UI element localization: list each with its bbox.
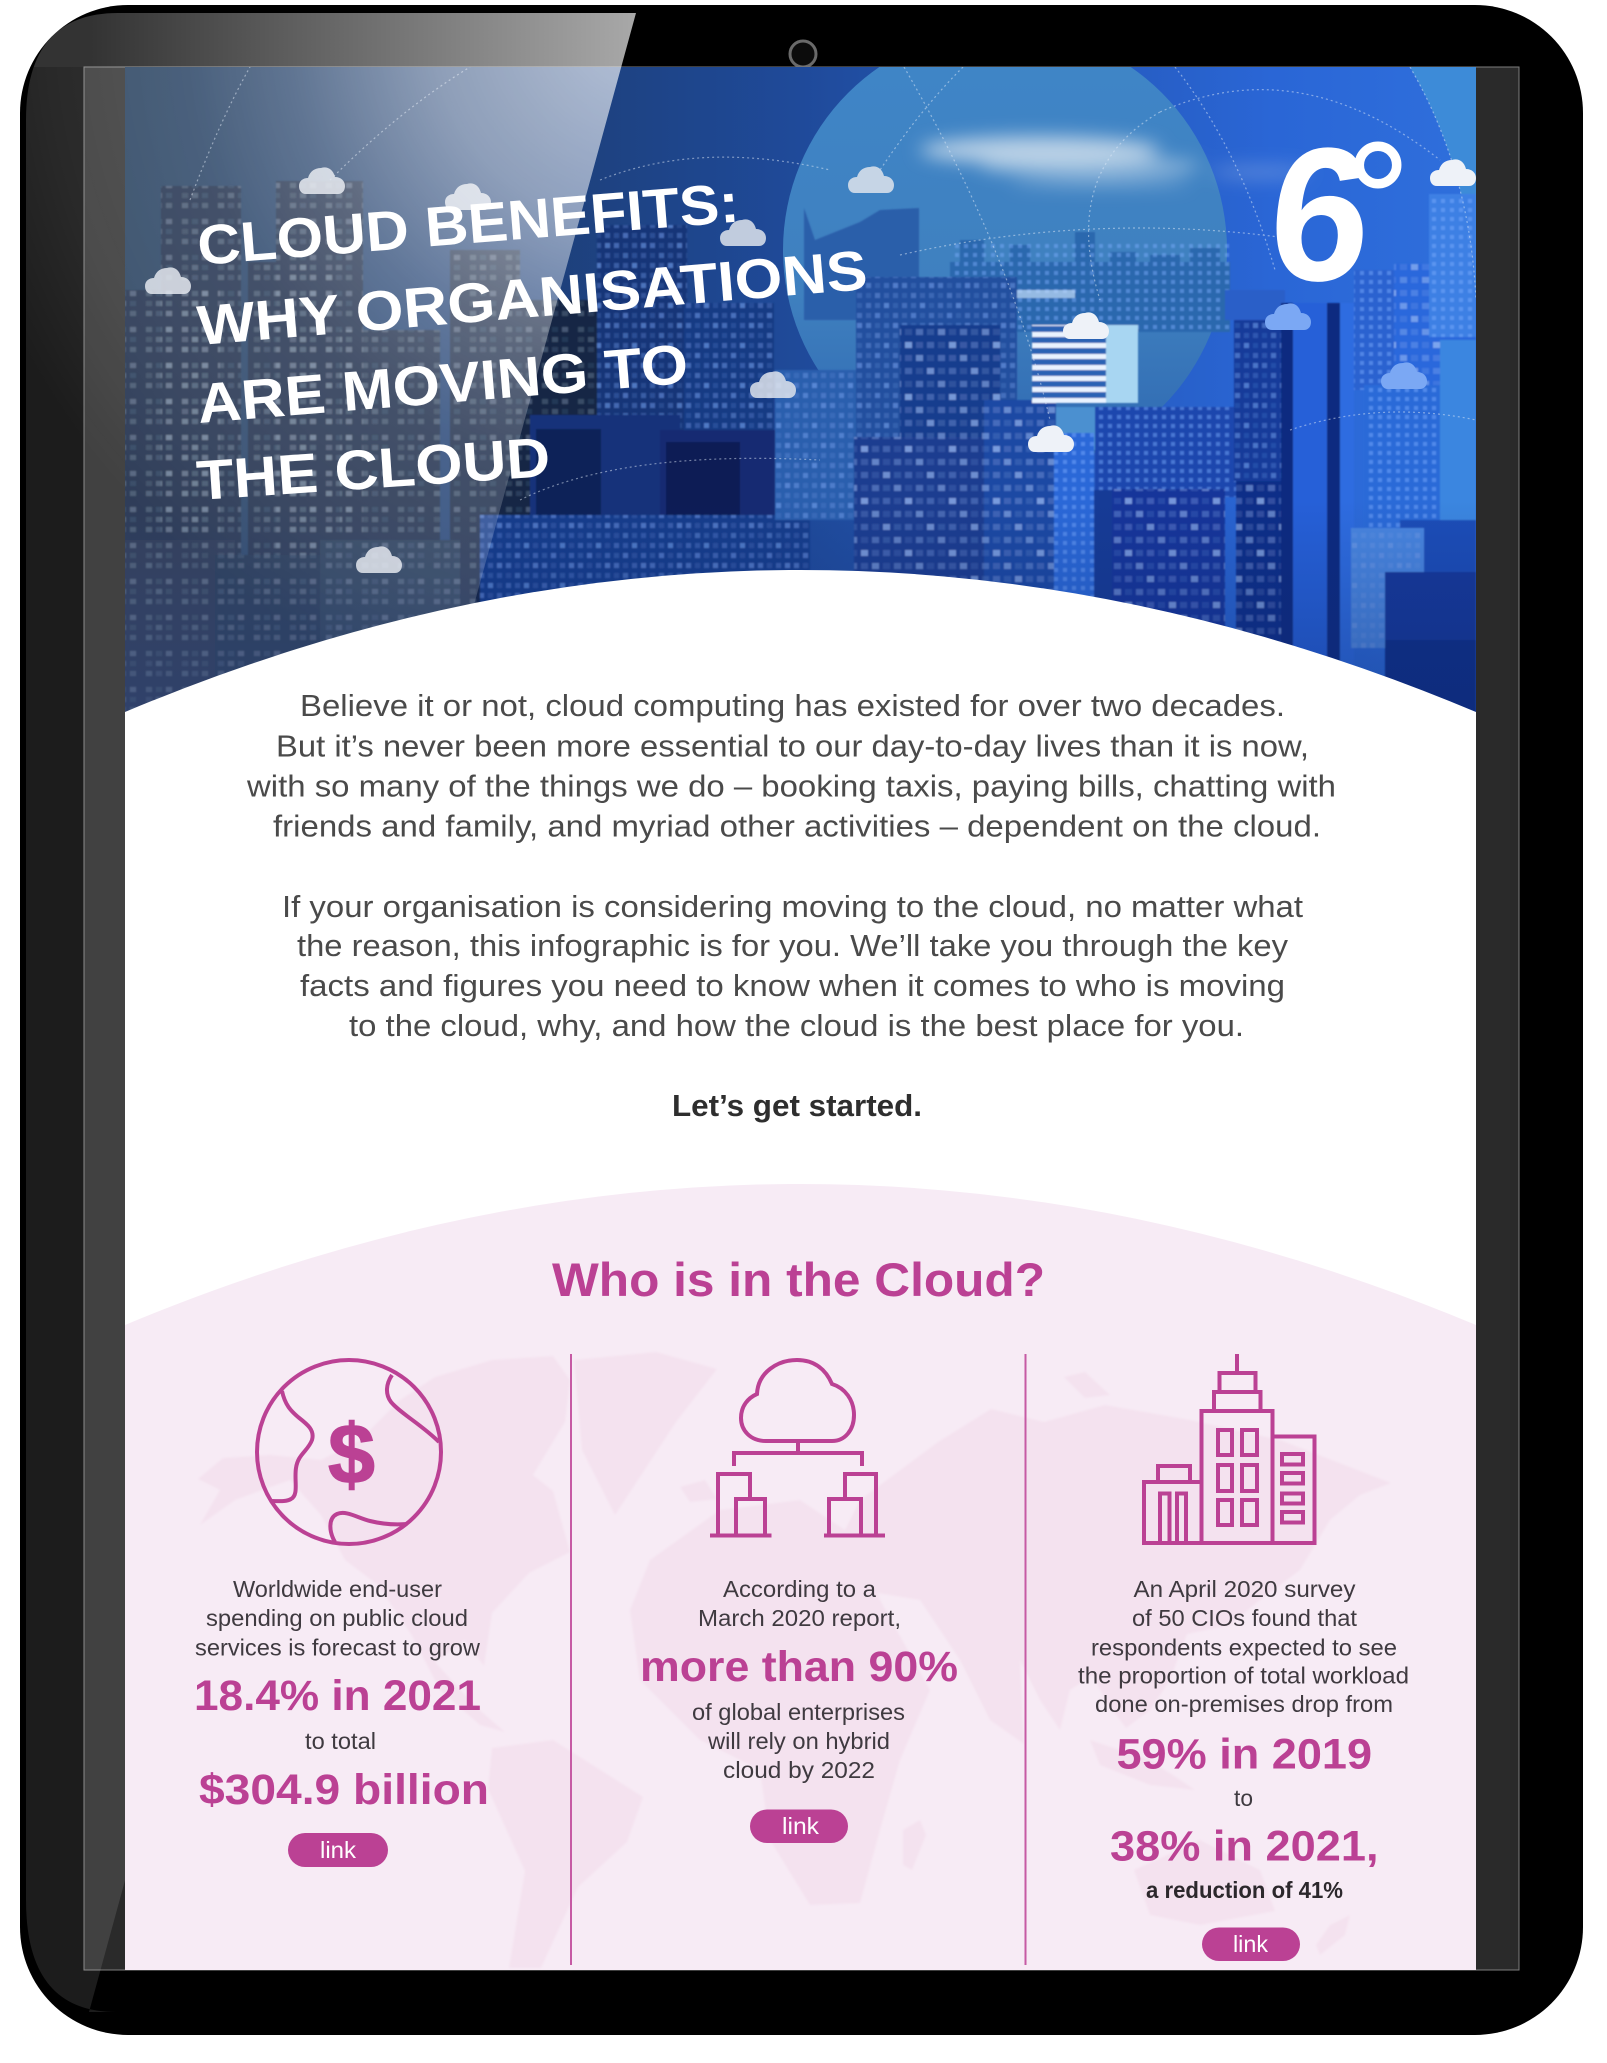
link button — [288, 1833, 388, 1867]
hybrid description — [692, 1699, 905, 1783]
title: ARE MOVING TO — [195, 332, 690, 435]
link button: link — [782, 1813, 820, 1839]
network arcs — [190, 67, 1476, 500]
left buildings — [125, 180, 598, 606]
intro text block: friends and family, and myriad other activities – dependent on the cloud. — [273, 810, 1321, 844]
survey description: An April 2020 survey — [1134, 1576, 1356, 1602]
hybrid description: of global enterprises — [692, 1699, 905, 1725]
stat: more than 90%: more than 90% — [640, 1643, 958, 1691]
hybrid intro text: According to a — [723, 1576, 876, 1602]
text: to: to — [1234, 1785, 1253, 1811]
text: a reduction of 41%: a reduction of 41% — [1146, 1877, 1343, 1903]
panel: survey column — [1078, 1354, 1409, 1961]
intro text block: Let’s get started. — [672, 1089, 922, 1123]
hybrid description: will rely on hybrid — [707, 1728, 890, 1754]
icon: city buildings — [1144, 1354, 1314, 1543]
panel: who is in the cloud background — [125, 1184, 1476, 1970]
intro text block: the reason, this infographic is for you. We’ll take you through the key — [297, 929, 1289, 963]
intro text block: facts and figures you need to know when it comes to who is moving — [300, 969, 1285, 1003]
section heading: Who is in the Cloud? — [552, 1253, 1045, 1306]
panel: spending column — [194, 1360, 489, 1867]
navy middle buildings — [596, 225, 687, 430]
stat: 38% in 2021: 38% in 2021, — [1110, 1822, 1378, 1870]
screen glare — [20, 5, 660, 2035]
title: THE CLOUD — [195, 425, 552, 512]
spending description: spending on public cloud — [206, 1605, 468, 1631]
icon: globe with dollar: $ — [328, 1407, 375, 1501]
hybrid intro text — [698, 1576, 901, 1631]
survey description: respondents expected to see — [1091, 1634, 1397, 1660]
link button — [750, 1810, 848, 1843]
intro text block: Believe it or not, cloud computing has existed for over two decades. — [300, 689, 1285, 723]
spending description — [195, 1576, 480, 1660]
stat: $304.9 billion: $304.9 billion — [199, 1766, 489, 1814]
title: CLOUD BENEFITS: — [195, 171, 741, 277]
faint world map — [198, 1352, 1391, 1968]
link button — [1202, 1928, 1300, 1961]
icon: globe with dollar — [257, 1360, 441, 1544]
right buildings — [1094, 406, 1237, 498]
intro text block: to the cloud, why, and how the cloud is the best place for you. — [349, 1009, 1244, 1043]
logo: 6 degrees: 6 — [1263, 109, 1378, 321]
icon: cloud network — [710, 1360, 885, 1536]
link button: link — [1233, 1931, 1269, 1957]
link button: link — [320, 1837, 357, 1863]
hybrid description: cloud by 2022 — [723, 1757, 875, 1783]
text: to total: to total — [305, 1728, 376, 1754]
middle distant skyline — [950, 232, 1230, 332]
survey description: the proportion of total workload — [1078, 1662, 1409, 1688]
title: WHY ORGANISATIONS — [195, 238, 870, 357]
camera — [790, 41, 816, 67]
spending description: Worldwide end-user — [233, 1576, 442, 1602]
stat: 18.4% in 2021: 18.4% in 2021 — [194, 1672, 481, 1720]
survey description: done on-premises drop from — [1095, 1691, 1393, 1717]
title — [195, 171, 870, 512]
panel: hybrid cloud column — [640, 1360, 958, 1843]
stat: 59% in 2019: 59% in 2019 — [1116, 1730, 1372, 1778]
intro text block: If your organisation is considering moving to the cloud, no matter what — [282, 890, 1304, 924]
hybrid intro text: March 2020 report, — [698, 1605, 901, 1631]
intro text block: But it’s never been more essential to our day-to-day lives than it is now, — [276, 730, 1309, 764]
hero city image — [124, 28, 1476, 733]
spending description: services is forecast to grow — [195, 1634, 480, 1660]
survey description: of 50 CIOs found that — [1132, 1605, 1358, 1631]
intro text block — [246, 689, 1336, 1123]
cloud markers — [145, 159, 1476, 573]
survey description — [1078, 1576, 1409, 1717]
column dividers — [571, 1354, 1026, 1965]
intro text block: with so many of the things we do – booking taxis, paying bills, chatting with — [246, 770, 1336, 804]
white intro panel background — [125, 570, 1476, 1340]
